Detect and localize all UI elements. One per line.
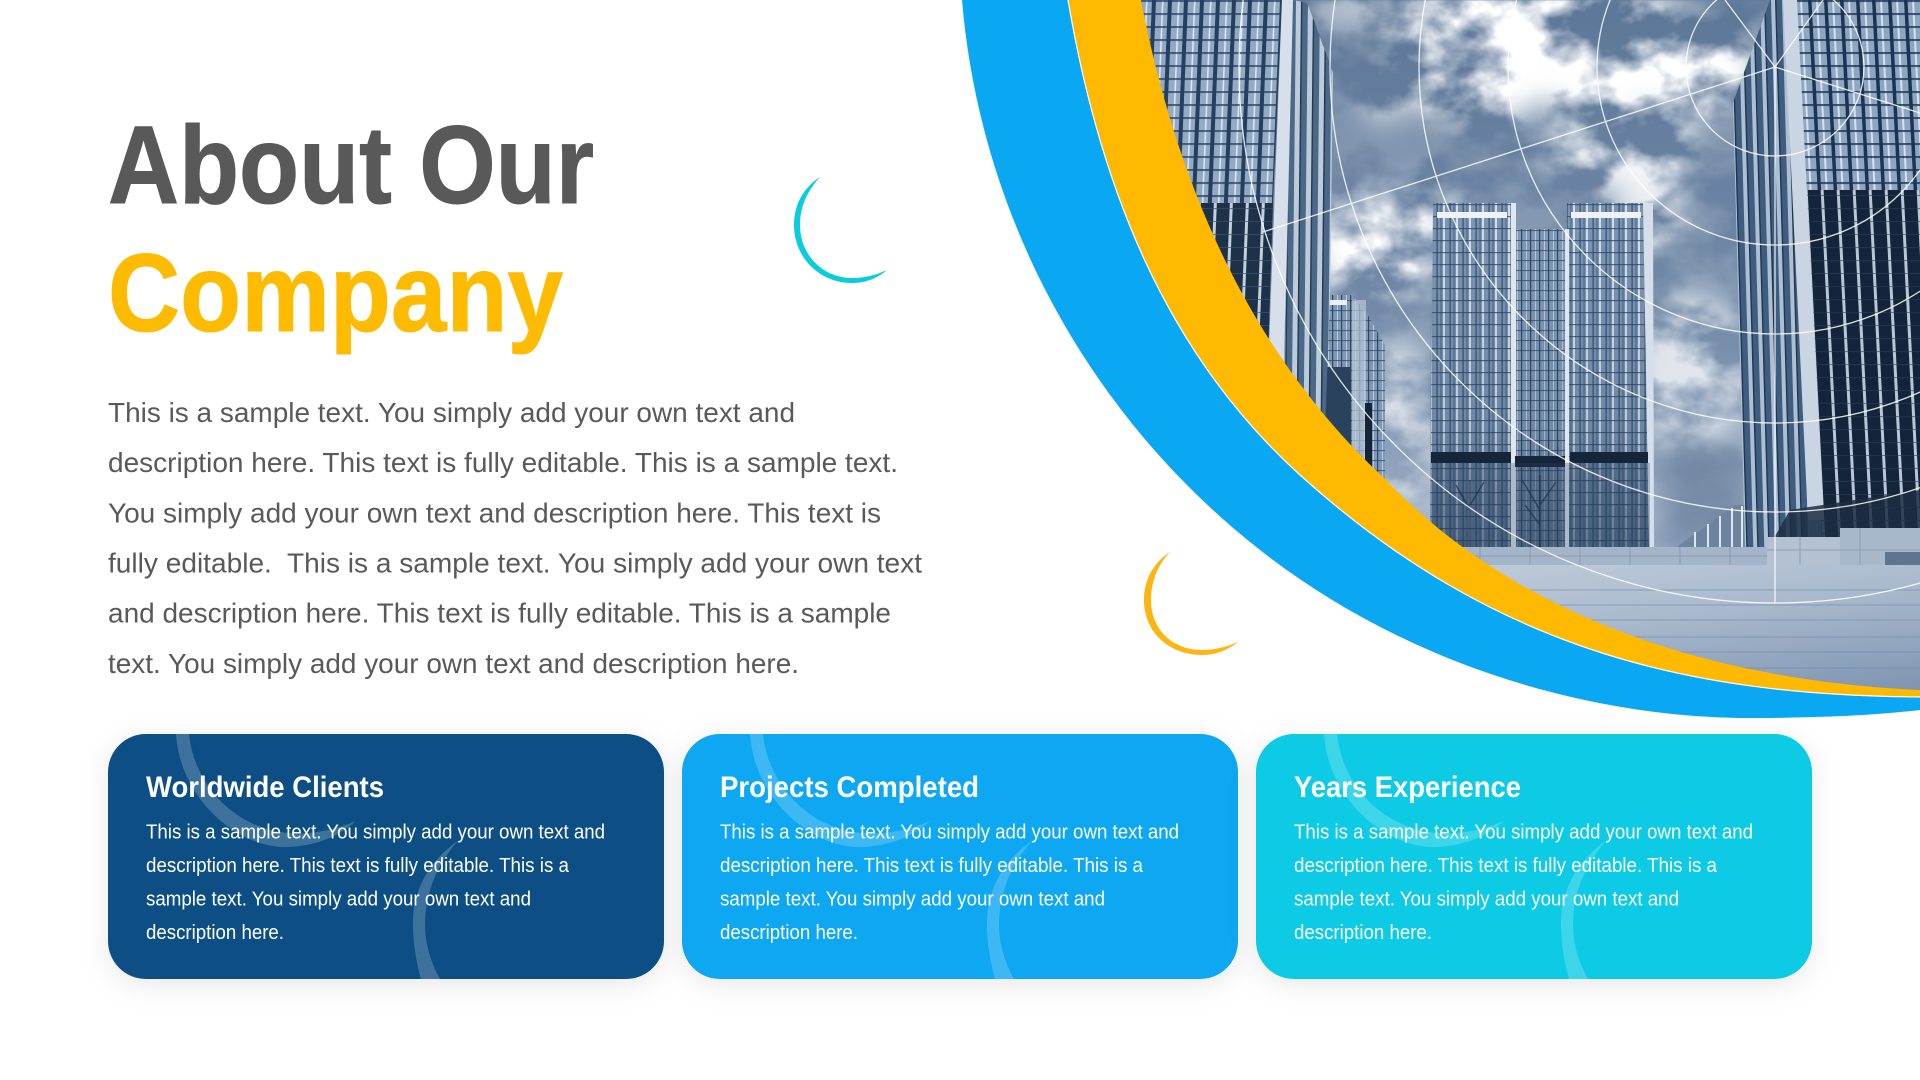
card swirls	[176, 734, 459, 979]
panel: years experience	[1256, 734, 1812, 979]
yellow swoosh	[1068, 0, 1920, 697]
paving lines	[1500, 590, 1920, 668]
ground	[1488, 565, 1920, 690]
description: description here.	[720, 921, 858, 944]
photo: city skyscrapers	[1100, 0, 1920, 725]
description: description here. This text is fully editable. This is a	[1294, 854, 1718, 877]
body paragraph: text. You simply add your own text and description here.	[108, 648, 799, 679]
title: About Our	[108, 104, 594, 227]
sky	[1141, 0, 1822, 570]
right tower fins	[1733, 0, 1810, 547]
left tower face upper	[1141, 0, 1282, 203]
description: sample text. You simply add your own text and	[720, 888, 1105, 910]
description: description here. This text is fully editable. This is a	[720, 854, 1144, 877]
icon: teal crescent	[794, 177, 887, 283]
left tower corner	[1269, 0, 1293, 362]
description: description here.	[146, 921, 284, 944]
body paragraph: You simply add your own text and description here. This text is	[108, 498, 881, 528]
body paragraph: This is a sample text. You simply add your own text and	[108, 397, 795, 428]
bare trees	[1456, 475, 1556, 547]
description: sample text. You simply add your own text and	[1294, 888, 1679, 910]
card swirls	[750, 734, 1033, 979]
card swirls	[1324, 734, 1607, 979]
right tower corner	[1783, 0, 1824, 520]
white line geometry	[1239, 0, 1920, 603]
right tower face upper	[1797, 0, 1920, 190]
description	[146, 820, 605, 944]
description: sample text. You simply add your own text and	[146, 888, 531, 910]
description: description here.	[1294, 921, 1432, 944]
panel: projects completed	[682, 734, 1238, 979]
body paragraph	[108, 397, 922, 679]
heading: Years Experience	[1294, 771, 1521, 804]
icon: yellow crescent	[1144, 552, 1238, 655]
sky shadow low right	[1660, 450, 1750, 550]
distant low building	[1677, 505, 1748, 547]
description	[1294, 820, 1753, 944]
heading: Projects Completed	[720, 771, 979, 804]
glass canopy	[1775, 490, 1920, 537]
description: This is a sample text. You simply add your own text and	[720, 820, 1179, 844]
heading: Worldwide Clients	[146, 771, 384, 804]
clouds	[1270, 0, 1770, 579]
stone wall	[1430, 528, 1920, 565]
description	[720, 820, 1179, 944]
body paragraph: fully editable. This is a sample text. You simply add your own text	[108, 548, 922, 578]
body paragraph: description here. This text is fully editable. This is a sample text.	[108, 447, 898, 478]
title	[108, 104, 594, 355]
panel: worldwide clients	[108, 734, 664, 979]
left tower fins	[1283, 0, 1333, 430]
back building	[1325, 295, 1385, 479]
description: This is a sample text. You simply add your own text and	[1294, 820, 1753, 844]
right tower face lower	[1805, 190, 1920, 540]
body paragraph: and description here. This text is fully editable. This is a sample	[108, 598, 891, 628]
description: This is a sample text. You simply add your own text and	[146, 820, 605, 844]
left tower face lower	[1200, 203, 1273, 339]
blue swoosh	[962, 0, 1920, 718]
twin towers	[1430, 203, 1654, 547]
description: description here. This text is fully editable. This is a	[146, 854, 570, 877]
title: Company	[108, 232, 563, 355]
